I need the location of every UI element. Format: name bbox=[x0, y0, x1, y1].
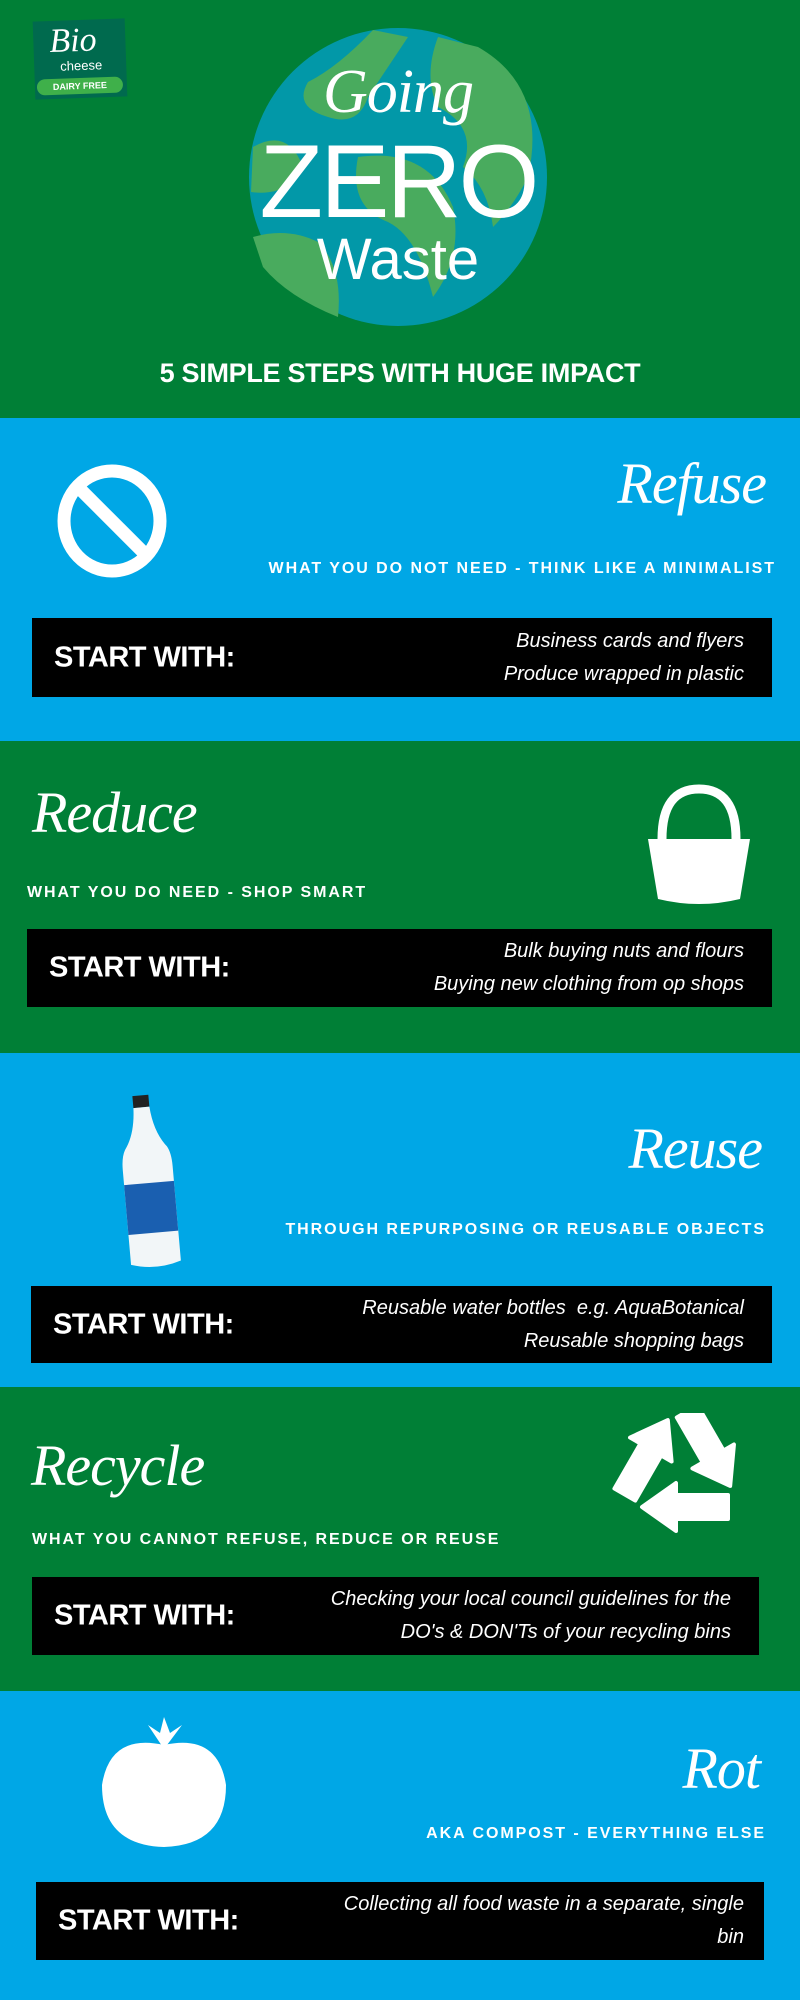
start with box: START WITH: bbox=[53, 1308, 234, 1340]
logo: DAIRY FREE bbox=[53, 80, 107, 92]
start with box: START WITH: bbox=[49, 952, 230, 984]
start with box: DO's & DON'Ts of your recycling bins bbox=[401, 1621, 731, 1643]
subtitle: WHAT YOU DO NOT NEED - THINK LIKE A MINIMALIST bbox=[269, 560, 776, 577]
start with box bbox=[32, 618, 772, 697]
title: Going ZERO Waste: Going bbox=[323, 58, 473, 126]
logo bbox=[33, 18, 127, 100]
subtitle: THROUGH REPURPOSING OR REUSABLE OBJECTS bbox=[285, 1221, 766, 1238]
panel: recycle bbox=[0, 1387, 800, 1691]
heading: Reduce: Reduce bbox=[32, 780, 197, 845]
logo: Bio bbox=[49, 21, 97, 60]
start with box bbox=[31, 1286, 772, 1363]
panel: refuse bbox=[0, 418, 800, 741]
start with box: START WITH: bbox=[54, 1600, 235, 1632]
logo: cheese bbox=[60, 57, 102, 74]
start with box: START WITH: bbox=[54, 641, 235, 673]
globe bbox=[249, 28, 547, 326]
panel: reuse bbox=[0, 1053, 800, 1387]
panel: rot bbox=[0, 1691, 800, 2000]
icon: bottle bbox=[122, 1094, 181, 1267]
title: Going ZERO Waste: Waste bbox=[317, 227, 479, 292]
subtitle: 5 SIMPLE STEPS WITH HUGE IMPACT bbox=[160, 358, 640, 388]
start with box: Business cards and flyers bbox=[516, 630, 744, 652]
subtitle: WHAT YOU CANNOT REFUSE, REDUCE OR REUSE bbox=[32, 1531, 500, 1548]
start with box: Collecting all food waste in a separate, single bbox=[344, 1893, 744, 1915]
heading: Recycle: Recycle bbox=[31, 1433, 204, 1498]
panel: reduce bbox=[0, 741, 800, 1053]
heading: Refuse: Refuse bbox=[617, 451, 766, 516]
start with box bbox=[32, 1577, 759, 1655]
subtitle: WHAT YOU DO NEED - SHOP SMART bbox=[27, 884, 367, 901]
start with box: Bulk buying nuts and flours bbox=[504, 940, 744, 962]
heading: Reuse: Reuse bbox=[628, 1116, 762, 1181]
start with box: Buying new clothing from op shops bbox=[434, 973, 744, 995]
title: Going ZERO Waste bbox=[260, 58, 536, 292]
start with box: bin bbox=[717, 1926, 744, 1948]
start with box bbox=[36, 1882, 764, 1960]
heading: Rot: Rot bbox=[682, 1736, 760, 1801]
icon: recycle bbox=[612, 1413, 736, 1533]
start with box: Reusable water bottles e.g. AquaBotanical bbox=[362, 1296, 744, 1318]
start with box: Produce wrapped in plastic bbox=[504, 662, 744, 684]
start with box: Reusable shopping bags bbox=[524, 1330, 744, 1352]
icon: no sign bbox=[58, 464, 166, 578]
start with box bbox=[27, 929, 772, 1007]
title: Going ZERO Waste: ZERO bbox=[260, 124, 536, 240]
icon: basket bbox=[648, 784, 750, 904]
icon: tomato bbox=[102, 1717, 226, 1847]
header panel bbox=[0, 0, 800, 418]
subtitle: AKA COMPOST - EVERYTHING ELSE bbox=[426, 1825, 766, 1842]
start with box: Checking your local council guidelines for the bbox=[331, 1588, 731, 1610]
start with box: START WITH: bbox=[58, 1904, 239, 1936]
